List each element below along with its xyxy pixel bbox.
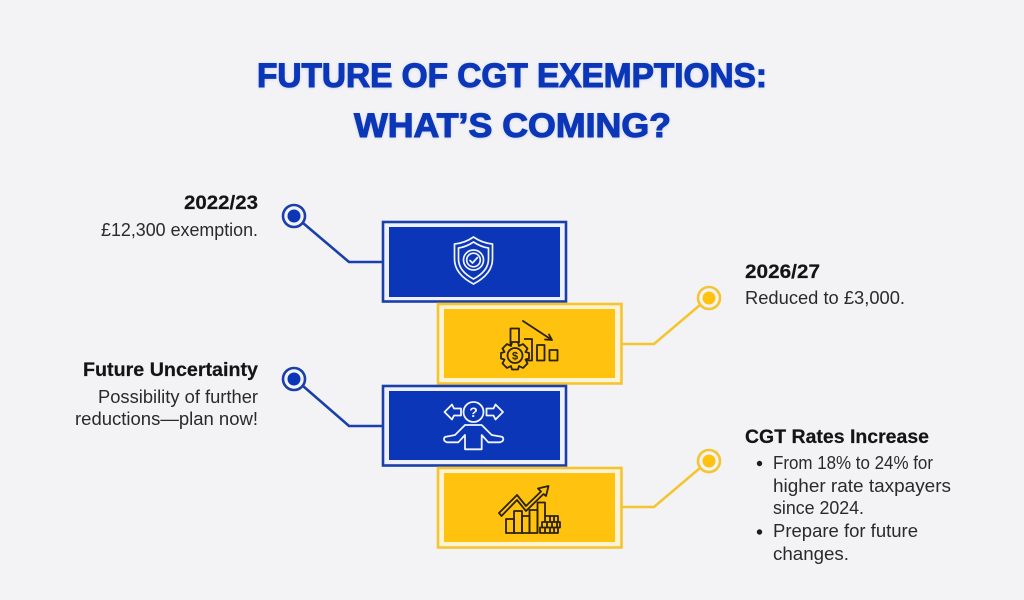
text: Future Uncertainty: Future Uncertainty bbox=[83, 359, 258, 381]
text: CGT Rates Increase: since 2024. bbox=[773, 498, 864, 518]
box: blue Future Uncertainty bbox=[383, 386, 566, 466]
text: Future Uncertainty: Possibility of further bbox=[98, 387, 258, 407]
text: CGT Rates Increase: changes. bbox=[773, 544, 849, 564]
text: 2022/23: 2022/23 bbox=[184, 192, 258, 214]
title: FUTURE OF CGT EXEMPTIONS: bbox=[257, 57, 767, 95]
text: 2022/23: £12,300 exemption. bbox=[101, 220, 258, 240]
title: FUTURE OF CGT EXEMPTIONS: bbox=[257, 58, 767, 96]
icon: shield with check bbox=[454, 237, 492, 284]
title: WHAT’S COMING? bbox=[354, 107, 671, 145]
box: blue 2022/23 bbox=[383, 222, 566, 302]
text: CGT Rates Increase: From 18% to 24% for bbox=[773, 453, 933, 473]
icon: person with question mark and arrows bbox=[444, 402, 503, 449]
text: Future Uncertainty: reductions—plan now! bbox=[75, 409, 258, 429]
icon: falling bars with gear: $ bbox=[512, 350, 518, 362]
connector: CGT Rates Increase bbox=[621, 450, 720, 507]
box: yellow 2026/27 bbox=[438, 304, 622, 384]
text: CGT Rates Increase bbox=[745, 426, 951, 564]
text: 2026/27: Reduced to £3,000. bbox=[745, 288, 905, 308]
connector: 2022/23 bbox=[283, 205, 383, 262]
icon: rising chart with coins bbox=[499, 486, 560, 533]
title: WHAT’S COMING? bbox=[354, 108, 671, 146]
text: 2022/23 bbox=[101, 192, 258, 240]
connector: Future Uncertainty bbox=[283, 368, 383, 426]
text: CGT Rates Increase: higher rate taxpayers bbox=[773, 476, 951, 496]
text: Future Uncertainty bbox=[75, 359, 258, 429]
text: 2026/27: 2026/27 bbox=[745, 261, 820, 283]
text: CGT Rates Increase: CGT Rates Increase bbox=[745, 426, 929, 448]
box: yellow CGT Rates Increase bbox=[438, 468, 622, 548]
title bbox=[257, 57, 767, 146]
icon: person with question mark and arrows: ? bbox=[469, 404, 478, 420]
connector: 2026/27 bbox=[621, 287, 720, 344]
text: CGT Rates Increase: Prepare for future bbox=[773, 521, 918, 541]
icon: falling bars with gear bbox=[501, 321, 558, 370]
text: 2026/27 bbox=[745, 261, 905, 308]
